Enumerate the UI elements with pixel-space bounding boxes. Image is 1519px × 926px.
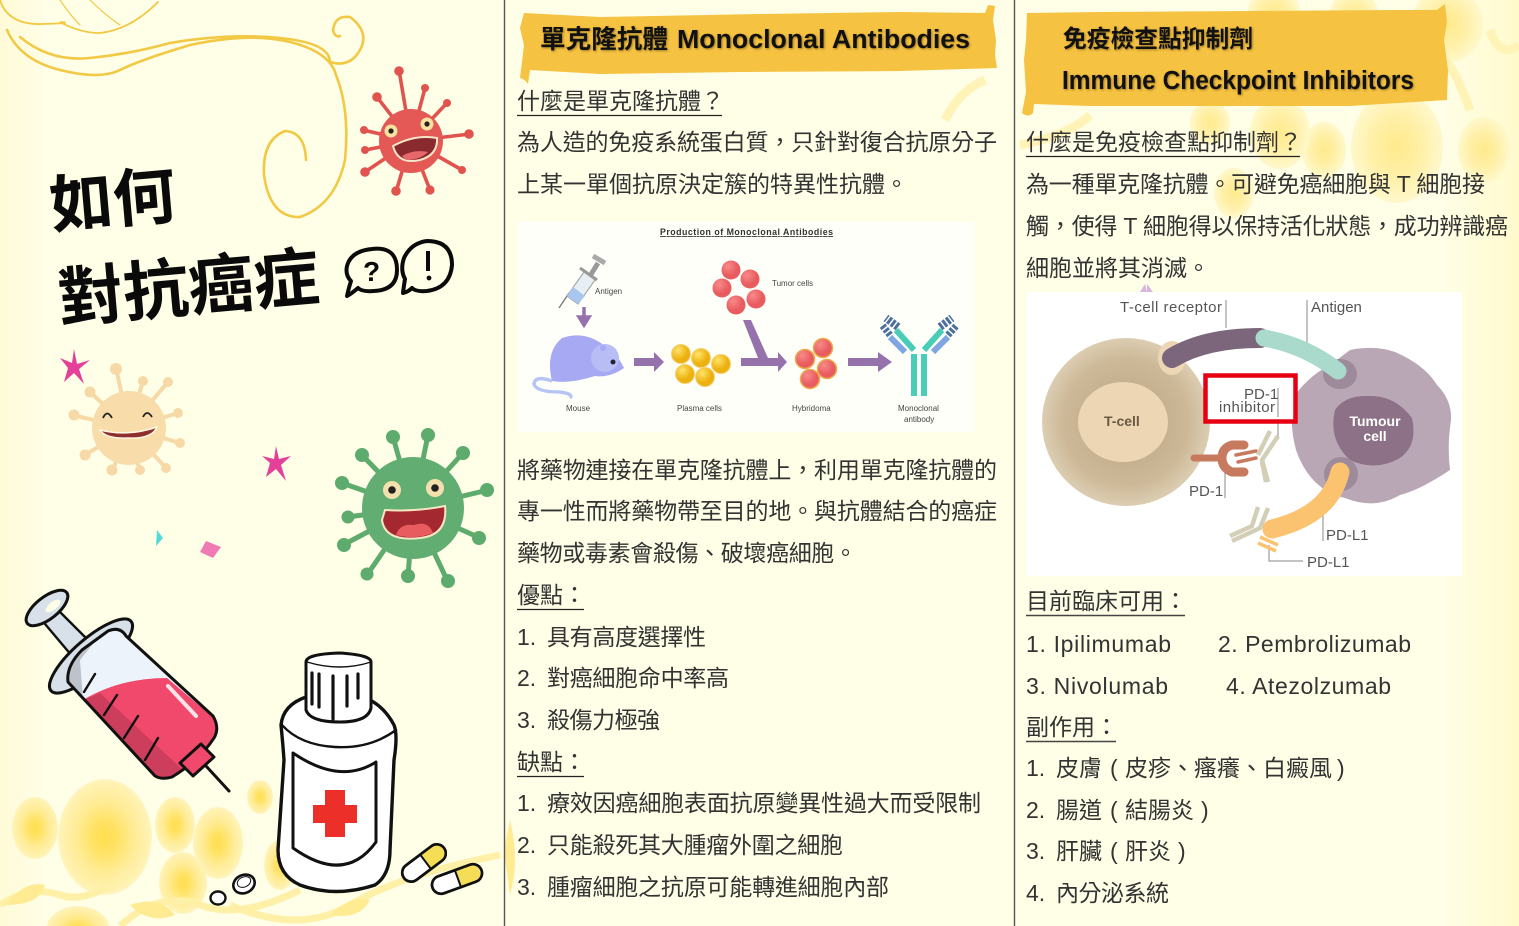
text block: what are monoclonal antibodies: 為人造的免疫系統蛋白質，只針對復合抗原分子 (517, 129, 997, 155)
banner: immune checkpoint inhibitors (1022, 4, 1448, 116)
text block: disadvantages: 只能殺死其大腫瘤外圍之細胞 (547, 832, 843, 858)
chart: production of monoclonal antibodies: Plasma cells (677, 404, 722, 413)
T-cell receptor (1172, 338, 1260, 358)
text block: mechanism (517, 457, 997, 566)
text block: side effects: 1. (1026, 755, 1045, 781)
chart labels: T-cell receptor (1120, 299, 1222, 316)
chart: production of monoclonal antibodies: Monoclonal (898, 404, 939, 413)
text block: available drugs: 2. Pembrolizumab (1218, 631, 1411, 657)
chart: production of monoclonal antibodies: Mouse (566, 404, 591, 413)
text block: advantages: 1. (517, 624, 536, 650)
icon: monoclonal antibody (882, 318, 957, 396)
text block: disadvantages: 3. (517, 874, 536, 900)
icon: syringe (21, 584, 229, 791)
text block: side effects: ( (1110, 755, 1118, 781)
arrow: tumor cells and plasma to hybridoma (741, 320, 787, 372)
title: 對抗癌症 (55, 240, 322, 336)
text block: what are checkpoint inhibitors: 細胞並將其消滅。 (1026, 255, 1210, 281)
text block: advantages (517, 582, 729, 733)
arrow: mouse to plasma cells (634, 352, 664, 372)
text block: disadvantages: 2. (517, 832, 536, 858)
chart labels: PD-1 (1189, 483, 1223, 500)
icon: question and exclamation speech bubbles (346, 241, 452, 296)
text block: advantages: 優點： (517, 582, 586, 608)
text block: advantages: 對癌細胞命中率高 (547, 665, 729, 691)
arrow: antigen to mouse (579, 307, 589, 325)
antibody drug on PD-L1 (1230, 507, 1268, 541)
chart: production of monoclonal antibodies (517, 222, 975, 432)
T-cell (1042, 338, 1210, 506)
title: 如何 (47, 161, 179, 242)
text block: disadvantages: 缺點： (517, 749, 586, 775)
PD-1 receptor (1194, 445, 1256, 472)
text block: side effects: ) (1337, 755, 1345, 781)
icon: green virus (338, 430, 492, 586)
text block: side effects: ) (1178, 838, 1186, 864)
text block: advantages: 殺傷力極強 (547, 707, 660, 733)
text block: advantages: 2. (517, 665, 536, 691)
text block: what are checkpoint inhibitors: 觸，使得 T 細胞得以保持活化狀態，成功辨識癌 (1026, 213, 1508, 239)
leader lines (1225, 300, 1323, 561)
icon: medicine bottle (278, 653, 396, 892)
chart labels: inhibitor (1219, 399, 1275, 416)
banner: immune checkpoint inhibitors: 免疫檢查點抑制劑 (1063, 25, 1253, 53)
background flowers: bottom left (0, 779, 515, 926)
chart: production of monoclonal antibodies: Antigen (595, 287, 622, 296)
icon: question and exclamation speech bubbles: ? (363, 256, 380, 287)
text block: what are checkpoint inhibitors: 為一種單克隆抗體。可避免癌細胞與 T 細胞接 (1026, 171, 1485, 197)
chart labels (1120, 299, 1369, 571)
text block: advantages: 具有高度選擇性 (547, 624, 706, 650)
chart labels: Antigen (1311, 299, 1362, 316)
text block: side effects: ( (1110, 838, 1118, 864)
text block: disadvantages: 腫瘤細胞之抗原可能轉進細胞內部 (547, 874, 889, 900)
chart labels: PD-L1 (1326, 527, 1369, 544)
text block: disadvantages (517, 749, 981, 900)
text block: side effects: 2. (1026, 797, 1045, 823)
chart: production of monoclonal antibodies: antibody (904, 415, 934, 424)
chart: PD-1 inhibitor mechanism (1026, 292, 1462, 576)
red highlight box (1206, 376, 1296, 422)
text block: side effects: 內分泌系統 (1056, 880, 1169, 906)
T-cell: T-cell (1104, 413, 1140, 429)
icon: red virus (362, 68, 472, 194)
icon: pills (210, 841, 485, 904)
Tumour cell: Tumour (1349, 413, 1401, 429)
PD-L1 on tumour (1272, 472, 1340, 529)
antigen (1264, 338, 1338, 371)
Tumour cell: cell (1363, 428, 1387, 444)
arrow: hybridoma to antibody (848, 352, 892, 372)
text block: available drugs: 1. Ipilimumab (1026, 631, 1171, 657)
text block: mechanism: 專一性而將藥物帶至目的地。與抗體結合的癌症 (517, 498, 997, 524)
text block: disadvantages: 療效因癌細胞表面抗原變異性過大而受限制 (547, 790, 981, 816)
decorative swirl (0, 0, 363, 217)
antibody drug on PD-1 (1258, 431, 1278, 482)
text block: side effects: ( (1110, 797, 1118, 823)
banner: monoclonal antibodies: Monoclonal Antibodies (677, 26, 970, 54)
text block: what are checkpoint inhibitors: 什麼是免疫檢查點抑制劑？ (1026, 129, 1302, 155)
text block: side effects: 結腸炎 (1125, 797, 1194, 823)
text block: side effects: 皮疹、瘙癢、白癜風 (1125, 755, 1332, 781)
chart labels: PD-L1 (1307, 554, 1350, 571)
text block: side effects: 4. (1026, 880, 1045, 906)
text block: what are checkpoint inhibitors (1026, 129, 1508, 281)
icon: plasma cells (672, 344, 730, 386)
text block: disadvantages: 1. (517, 790, 536, 816)
Tumour cell (1292, 348, 1451, 503)
title (47, 161, 322, 336)
text block: available drugs: 3. Nivolumab (1026, 673, 1168, 699)
text block: side effects: 3. (1026, 838, 1045, 864)
icon: beige virus (70, 365, 183, 474)
icon: mouse (534, 335, 624, 398)
background flowers: top right (945, 0, 1519, 292)
text block: available drugs: 4. Atezolzumab (1226, 673, 1391, 699)
banner: monoclonal antibodies: 單克隆抗體 (540, 25, 668, 54)
chart: production of monoclonal antibodies: Hybridoma (792, 404, 831, 413)
text block: side effects: 副作用： (1026, 714, 1118, 740)
icon: tumor cells (712, 260, 766, 314)
icon: antigen syringe (559, 256, 605, 308)
banner: immune checkpoint inhibitors: Immune Checkpoint Inhibitors (1062, 67, 1414, 95)
text block: available drugs: 目前臨床可用： (1026, 588, 1187, 614)
text block: side effects: 肝炎 (1125, 838, 1171, 864)
text block: side effects: ) (1201, 797, 1209, 823)
text block: side effects (1026, 714, 1345, 906)
chart: production of monoclonal antibodies: Tumor cells (772, 279, 813, 288)
text block: side effects: 肝臟 (1056, 838, 1102, 864)
text block: mechanism: 藥物或毒素會殺傷、破壞癌細胞。 (517, 540, 857, 566)
text block: mechanism: 將藥物連接在單克隆抗體上，利用單克隆抗體的 (517, 457, 997, 483)
chart: production of monoclonal antibodies: Production of Monoclonal Antibodies (660, 227, 833, 237)
text block: side effects: 皮膚 (1056, 755, 1102, 781)
icon: hybridoma (796, 338, 836, 388)
banner: monoclonal antibodies (520, 5, 997, 84)
text block: side effects: 腸道 (1056, 797, 1102, 823)
text block: available drugs (1026, 588, 1411, 699)
text block: what are monoclonal antibodies: 什麼是單克隆抗體？ (517, 88, 724, 114)
text block: advantages: 3. (517, 707, 536, 733)
chart labels: PD-1 (1244, 386, 1278, 403)
text block: what are monoclonal antibodies: 上某一單個抗原決定簇的特異性抗體。 (517, 171, 908, 197)
text block: what are monoclonal antibodies (517, 88, 997, 197)
column dividers (504, 0, 1014, 926)
icon: pink pinwheels and confetti (60, 349, 291, 558)
